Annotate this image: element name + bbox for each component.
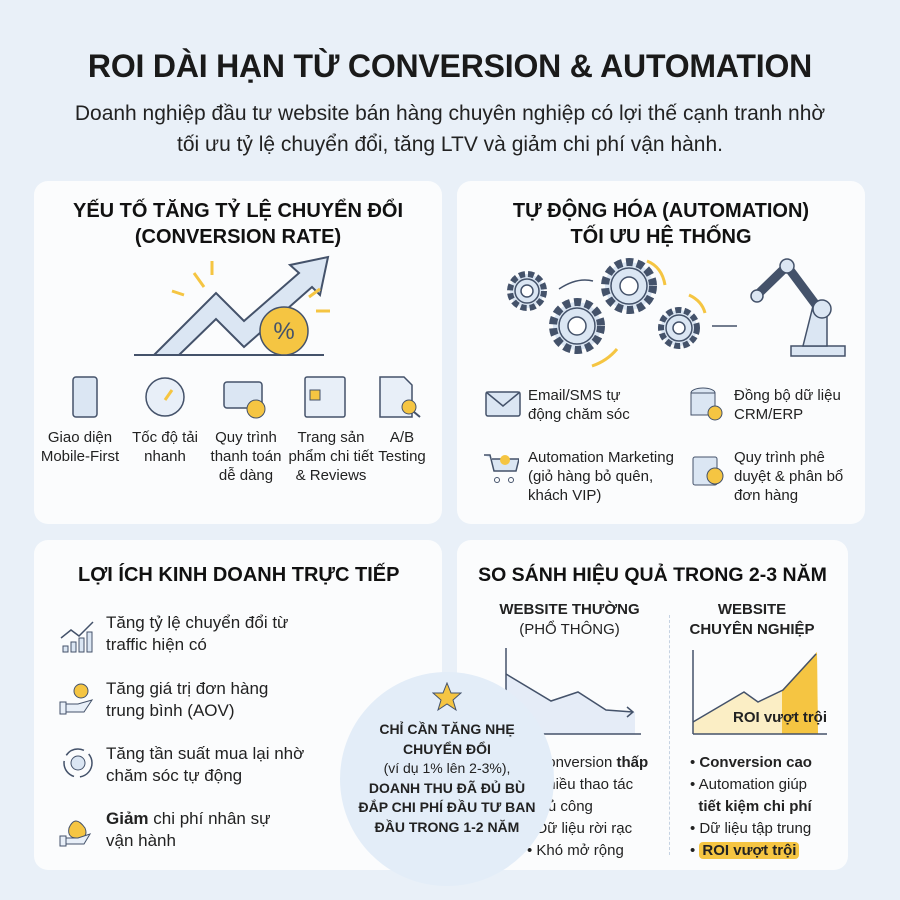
icon row: Tốc độ tải nhanh	[132, 429, 198, 465]
benefit list: Giảm chi phí nhân sự	[106, 809, 270, 828]
heading: TỰ ĐỘNG HÓA (AUTOMATION)	[513, 200, 809, 222]
benefit list: Tăng giá trị đơn hàng	[106, 679, 268, 698]
column: regular website: • Dữ liệu rời rạc	[527, 820, 632, 837]
heading: LỢI ÍCH KINH DOANH TRỰC TIẾP	[78, 564, 399, 586]
benefit list: vận hành	[106, 831, 176, 850]
icon row: Trang sản phẩm chi tiết & Reviews	[288, 429, 374, 484]
list: khách VIP)	[528, 487, 601, 504]
icon row: A/B Testing	[378, 429, 426, 465]
list: (giỏ hàng bỏ quên,	[528, 468, 653, 485]
list: Email/SMS tự	[528, 387, 621, 404]
heading: YẾU TỐ TĂNG TỶ LỆ CHUYỂN ĐỔI	[73, 200, 403, 222]
panel: conversion factors	[34, 181, 442, 524]
column: professional website: • Dữ liệu tập trung	[690, 820, 811, 837]
heading: (CONVERSION RATE)	[135, 226, 341, 248]
heading	[513, 198, 809, 248]
chart: rising	[692, 650, 827, 735]
callout text: (ví dụ 1% lên 2-3%),	[384, 760, 510, 776]
column: regular website: • Nhiều thao tác	[527, 776, 633, 793]
title: ROI DÀI HẠN TỪ CONVERSION & AUTOMATION	[88, 48, 812, 84]
icon row	[41, 376, 426, 484]
callout text	[358, 721, 536, 834]
benefit list: Tăng tần suất mua lại nhờ	[106, 744, 304, 763]
benefit list: chăm sóc tự động	[106, 766, 242, 785]
subtitle: Doanh nghiệp đầu tư website bán hàng chuyên nghiệp có lợi thế cạnh tranh nhờ tối ưu tỷ lệ chuyển đổi, tăng LTV và giảm chi phí vận hành.	[75, 102, 825, 156]
benefit list	[60, 613, 304, 850]
column: regular website	[499, 600, 648, 859]
chart: declining	[505, 648, 641, 735]
list: CRM/ERP	[734, 406, 803, 423]
labels: Giao diện Mobile-First	[41, 429, 119, 465]
chart: rising arrow: %	[273, 318, 295, 345]
chart: rising: ROI vượt trội	[733, 709, 827, 726]
column: professional website: WEBSITE	[718, 601, 786, 618]
column: professional website	[689, 601, 827, 859]
benefit list: trung bình (AOV)	[106, 701, 235, 720]
icon: star	[432, 682, 462, 711]
callout text: CHỈ CẦN TĂNG NHẸ	[379, 721, 515, 737]
callout text: ĐẮP CHI PHÍ ĐẦU TƯ BAN	[358, 799, 536, 815]
gears and robot arm	[507, 258, 846, 368]
list: duyệt & phân bổ	[734, 468, 843, 485]
panel: automation	[457, 181, 865, 524]
heading	[73, 198, 403, 248]
column: professional website: • Automation giúp	[690, 776, 807, 793]
panel: comparison	[457, 540, 848, 870]
icon row: Quy trình thanh toán dễ dàng	[211, 429, 281, 484]
column: professional website: CHUYÊN NGHIỆP	[689, 621, 815, 638]
column: professional website: • ROI vượt trội	[690, 842, 796, 859]
column: professional website: tiết kiệm chi phí	[698, 798, 812, 815]
list: động chăm sóc	[528, 406, 630, 423]
panel: business benefits	[34, 540, 442, 870]
list: đơn hàng	[734, 487, 798, 504]
list: Quy trình phê	[734, 449, 825, 466]
column: professional website: • Conversion cao	[690, 754, 812, 771]
heading: TỐI ƯU HỆ THỐNG	[570, 226, 752, 248]
callout text: ĐẦU TRONG 1-2 NĂM	[375, 818, 519, 834]
benefit list: traffic hiện có	[106, 635, 207, 654]
column: regular website: • Khó mở rộng	[527, 842, 624, 859]
callout circle	[340, 672, 554, 886]
list: Automation Marketing	[528, 449, 674, 466]
column: regular website: thủ công	[535, 798, 593, 815]
column: regular website: (PHỔ THÔNG)	[519, 621, 620, 638]
column: regular website: • Conversion thấp	[527, 754, 648, 771]
list: Đồng bộ dữ liệu	[734, 387, 841, 404]
callout text: CHUYỂN ĐỔI	[403, 740, 491, 756]
benefit list: Tăng tỷ lệ chuyển đổi từ	[106, 613, 288, 632]
callout text: DOANH THU ĐÃ ĐỦ BÙ	[369, 780, 525, 796]
list	[484, 387, 843, 504]
chart: rising arrow	[134, 256, 330, 356]
divider	[669, 615, 670, 855]
column: regular website: WEBSITE THƯỜNG	[499, 601, 640, 618]
heading: SO SÁNH HIỆU QUẢ TRONG 2-3 NĂM	[478, 564, 827, 586]
